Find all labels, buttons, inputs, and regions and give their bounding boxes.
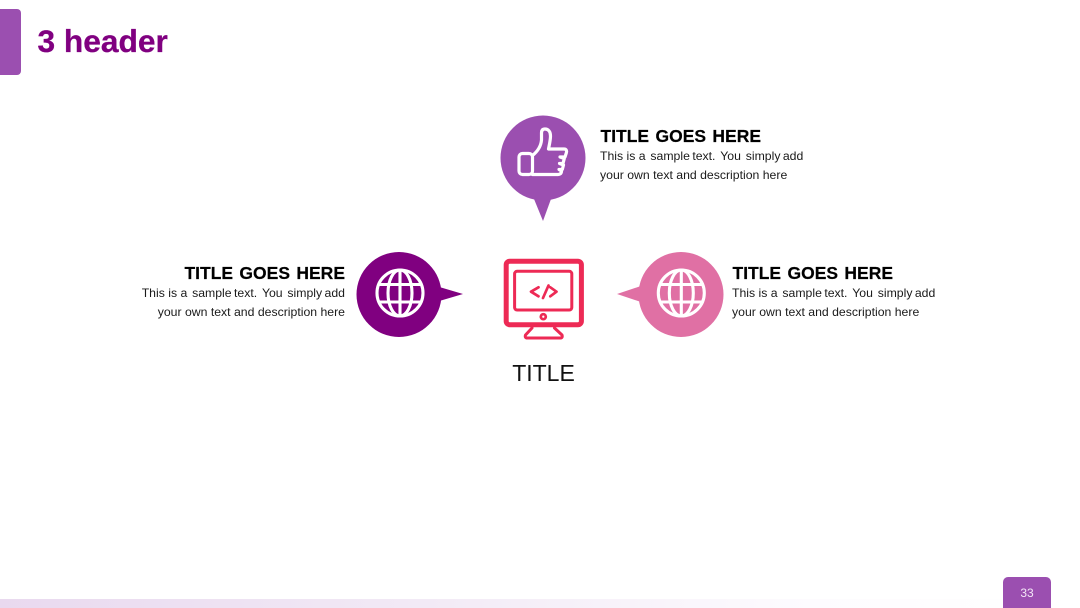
text: left item description: This is a sample text. You simply add (142, 286, 345, 300)
text: right item description: your own text and description here (732, 304, 919, 318)
header accent tab (0, 9, 21, 75)
text: right item title: TITLE GOES HERE (732, 263, 893, 283)
text: top item description: This is a sample text. You simply add (600, 149, 803, 163)
footer gradient band (0, 599, 1080, 608)
icon: left globe pin (356, 252, 463, 337)
text: left item description: your own text and description here (158, 304, 345, 318)
text: left item description (142, 286, 345, 318)
icon: thumbs up pin (500, 116, 586, 221)
text: central title: TITLE (512, 360, 575, 386)
icon: right globe pin (617, 252, 724, 337)
text: top item description: your own text and description here (600, 168, 787, 182)
text: left item title: TITLE GOES HERE (184, 263, 345, 283)
icon: central monitor (504, 258, 584, 340)
text: top item description (600, 149, 803, 182)
title: 3 header (38, 23, 168, 59)
text: right item description: This is a sample text. You simply add (732, 286, 935, 300)
text: top item title: TITLE GOES HERE (600, 126, 761, 146)
page number badge: 33 (1020, 586, 1034, 600)
page number badge (1003, 577, 1051, 608)
text: right item description (732, 286, 935, 318)
